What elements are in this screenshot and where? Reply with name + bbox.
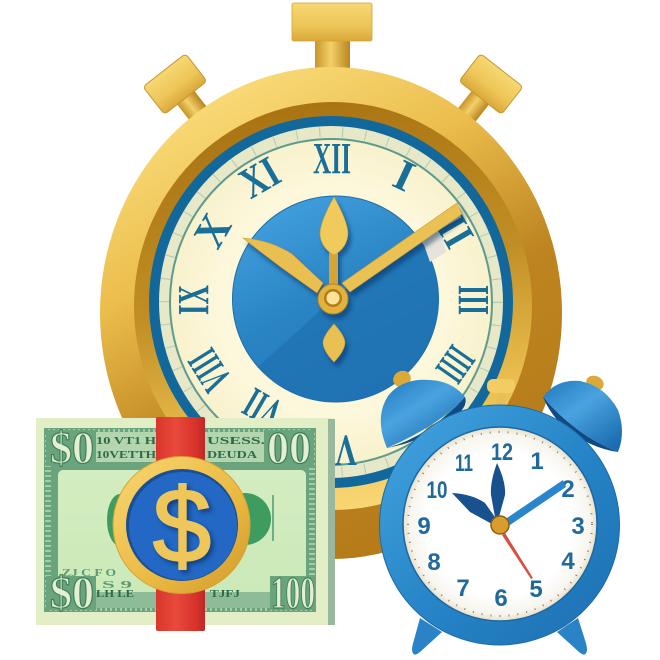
hour numbers: 11 <box>455 450 473 477</box>
blue dial ring <box>149 116 513 488</box>
corner denominations: $0 <box>50 423 94 473</box>
roman numerals: I <box>386 150 422 201</box>
engraved green border <box>44 428 316 612</box>
gleam beside hand <box>424 236 446 262</box>
left bell <box>381 368 466 448</box>
hour numbers: 7 <box>456 575 470 602</box>
gold case outer ring <box>100 67 562 559</box>
bottom microprint: ZJ C F O <box>62 567 117 579</box>
hour numbers: 4 <box>561 548 575 575</box>
corner denominations: 00 <box>267 423 311 473</box>
hour numbers <box>417 439 585 612</box>
bottom microprint <box>62 567 272 608</box>
red band <box>156 417 205 631</box>
gold case inner bevel <box>134 102 532 510</box>
light centre field <box>58 470 306 592</box>
blue centre disc <box>232 196 438 402</box>
white face <box>403 427 597 621</box>
corner denominations: $0 <box>50 568 94 618</box>
gold coin with dollar sign <box>113 456 250 594</box>
hour numbers: 6 <box>494 585 508 612</box>
centre knob <box>487 379 515 410</box>
hour numbers: 8 <box>427 549 441 576</box>
gold clock hands <box>243 197 462 362</box>
minute track band <box>159 126 503 478</box>
hour numbers: 10 <box>426 477 448 504</box>
right side button <box>440 54 523 138</box>
bottom microprint: TJFJ <box>210 588 241 600</box>
hour numbers: 1 <box>530 448 544 475</box>
top microprint: USESS. <box>207 435 265 447</box>
stopwatch: large gold clock <box>100 3 562 559</box>
alarm clock hands <box>452 463 566 579</box>
hour numbers: 9 <box>417 513 431 540</box>
right bell <box>543 373 622 452</box>
roman numerals: IX <box>169 285 218 315</box>
roman numerals: II <box>427 207 484 256</box>
gold coin with dollar sign: $ <box>153 468 211 585</box>
top microprint: 10VETTH <box>96 449 157 461</box>
roman numerals: IIII <box>426 337 485 391</box>
roman numerals: VII <box>235 378 291 439</box>
roman numerals: XI <box>231 147 288 208</box>
banknote with coin <box>36 417 335 631</box>
left side button <box>143 54 226 138</box>
roman numerals: III <box>449 285 498 315</box>
legs <box>412 618 587 655</box>
hour numbers: 3 <box>571 513 585 540</box>
top centre button <box>292 3 372 70</box>
note paper <box>36 418 333 625</box>
hour numbers: 12 <box>491 439 513 466</box>
roman numerals: VI <box>323 426 357 475</box>
top microprint <box>92 432 270 462</box>
hour numbers: 5 <box>529 576 543 603</box>
corner denominations: 100 <box>271 568 315 618</box>
roman numerals: X <box>184 205 241 256</box>
roman numerals: VIII <box>178 340 241 400</box>
alarm clock <box>380 368 622 655</box>
top microprint: 10 VT1 H <box>96 435 157 447</box>
top microprint: DEUDA <box>207 449 257 461</box>
roman numerals <box>169 134 498 475</box>
blue case <box>380 405 620 645</box>
cream dial face <box>170 139 492 465</box>
bottom microprint: LH LE <box>96 588 134 600</box>
green seal behind coin <box>107 493 274 546</box>
corner denominations <box>46 423 316 618</box>
bottom microprint: S 9 <box>102 579 133 591</box>
hour numbers: 2 <box>561 476 575 503</box>
roman numerals: XII <box>313 134 351 183</box>
